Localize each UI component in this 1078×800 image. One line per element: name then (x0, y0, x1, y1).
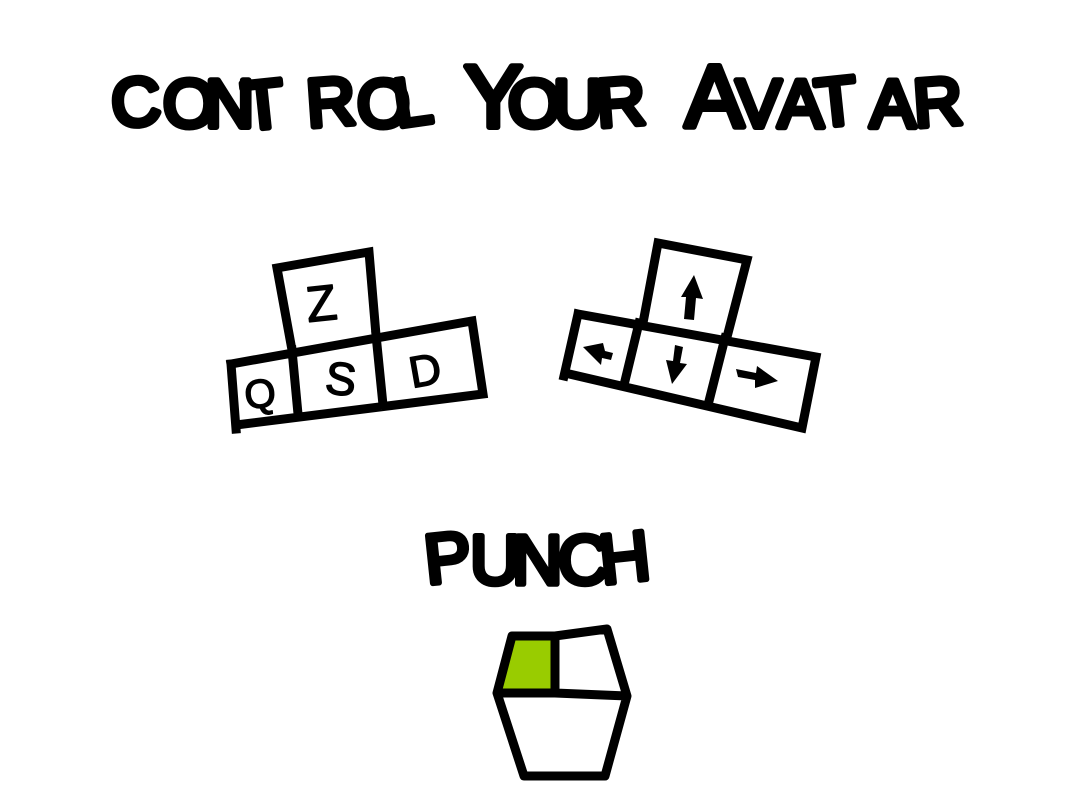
mouse outline (497, 629, 627, 776)
key outlines (231, 252, 483, 429)
icon: mouse with left button highlighted (497, 629, 627, 776)
title: OUR (508, 63, 669, 142)
icon: down arrow (666, 345, 687, 384)
heading: punch: PUNCH (420, 516, 654, 599)
title: Y (464, 47, 523, 146)
key Q: Q (242, 371, 278, 418)
title: CONTROL (109, 61, 437, 145)
key S: S (323, 351, 359, 406)
keyboard: arrow keys (564, 243, 816, 428)
key D: D (405, 344, 445, 398)
icon: up arrow (681, 275, 703, 320)
icon: left arrow (583, 343, 613, 365)
key Z: Z (303, 274, 340, 333)
keyboard: ZQSD keys (231, 252, 483, 429)
left mouse button highlight (500, 640, 555, 693)
title: A (685, 47, 744, 146)
title: VATAR (736, 62, 965, 142)
icon: right arrow (736, 366, 778, 388)
arrow key outlines (564, 243, 816, 428)
